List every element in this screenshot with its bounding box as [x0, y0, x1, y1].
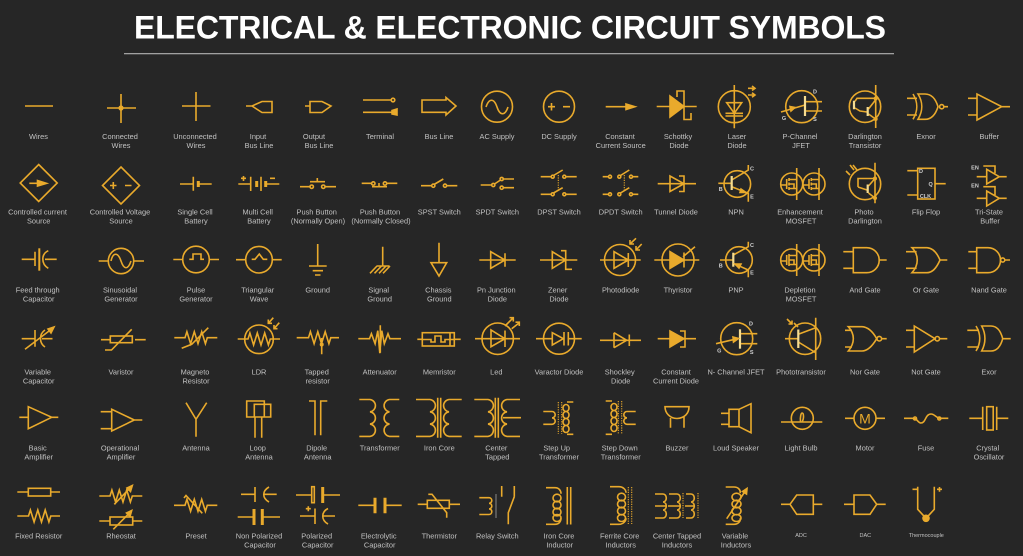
symbol: Pulse Generator — [173, 246, 219, 304]
symbol: Controlled Voltage Source: Controlled Voltage — [90, 208, 150, 216]
symbol: N-Channel JFET: G — [717, 348, 721, 354]
symbol: PNP: C — [750, 243, 754, 249]
symbol: Wires — [25, 106, 53, 141]
symbol: Unconnected Wires: Wires — [187, 141, 206, 150]
symbol: LDR: LDR — [252, 368, 266, 376]
symbol: Enhancement MOSFET: MOSFET — [786, 216, 817, 226]
symbol: Motor: M — [859, 410, 871, 426]
symbol: Preset — [174, 496, 217, 540]
symbol: Rheostat — [99, 486, 142, 540]
symbol: Loud Speaker — [713, 404, 760, 452]
symbol: Motor: Motor — [856, 444, 875, 452]
symbol: Variable Capacitor: Variable — [24, 368, 51, 376]
symbol: Variable Capacitor: Capacitor — [23, 376, 55, 386]
symbol: Not Gate: Not Gate — [911, 368, 941, 376]
symbol: Or Gate: Or Gate — [913, 286, 939, 295]
symbol: DPDT Switch — [599, 170, 643, 216]
symbol: Antenna — [182, 403, 211, 452]
symbol: Variable Capacitor — [22, 327, 55, 386]
symbol: P-Channel JFET: S — [813, 117, 817, 123]
symbol: Feed through Capacitor: Feed through — [16, 286, 60, 295]
symbol: Led — [475, 318, 520, 376]
symbol: Chassis Ground — [425, 243, 452, 304]
symbol: Magneto Resistor: Magneto — [181, 368, 209, 376]
symbol: Constant Current Source — [596, 104, 646, 150]
symbol: NPN: NPN — [728, 208, 744, 216]
symbol: Variable Inductors: Inductors — [721, 540, 752, 550]
symbol: Multi Cell Battery: Multi Cell — [243, 208, 273, 216]
symbol: Controlled Voltage Source — [90, 167, 150, 226]
symbol: P-Channel JFET: JFET — [792, 141, 810, 150]
symbol: Zener Diode: Diode — [549, 295, 569, 304]
symbol: Polarized Capacitor: Capacitor — [302, 540, 334, 550]
symbol: DC Supply: DC Supply — [541, 132, 577, 141]
symbol: Pn Junction Diode — [477, 252, 516, 304]
symbol: Ferrite Core Inductors: Inductors — [605, 540, 636, 550]
symbol: Tunnel Diode: Tunnel Diode — [654, 208, 698, 216]
symbol: Step Up Transformer — [539, 402, 580, 462]
symbol: Magneto Resistor: Resistor — [182, 376, 210, 386]
symbol: Flip Flop — [907, 168, 946, 216]
symbol: Nand Gate: Nand Gate — [971, 286, 1007, 295]
symbol: Controlled Voltage Source: Source — [109, 216, 133, 226]
symbol: Magneto Resistor — [174, 328, 217, 386]
symbol: Schottky Diode: Diode — [669, 141, 689, 150]
symbol: Basic Amplifier — [19, 407, 58, 462]
symbol: Loop Antenna: Loop — [249, 444, 266, 452]
symbol: Tri-State Buffer: Tri-State — [975, 208, 1003, 216]
symbol: Single Cell Battery — [177, 177, 213, 226]
symbol: Varactor Diode: Varactor Diode — [535, 368, 583, 376]
symbol: Wires: Wires — [29, 132, 48, 141]
symbol: Not Gate — [906, 326, 947, 376]
symbol: Triangular Wave: Wave — [250, 295, 268, 304]
symbol: Constant Current Diode: Current Diode — [653, 376, 699, 386]
symbol: Iron Core Inductor — [544, 487, 574, 550]
symbol: Ferrite Core Inductors: Ferrite Core — [600, 532, 639, 540]
symbol: Push Button (Normally Closed): Push Button — [360, 208, 400, 216]
symbol: Led: Led — [490, 368, 502, 376]
symbol: Non Polarized Capacitor: Non Polarized — [236, 532, 282, 540]
symbol: Signal Ground — [367, 247, 392, 304]
symbol: Relay Switch — [476, 486, 519, 540]
symbol: Electrolytic Capacitor: Electrolytic — [361, 532, 397, 540]
symbol: Preset: Preset — [185, 532, 207, 540]
symbol: DC Supply — [541, 91, 577, 141]
symbol: Enhancement MOSFET: Enhancement — [777, 208, 823, 216]
symbol: Flip Flop: CLK — [920, 194, 931, 200]
symbol: Darlington Transistor — [848, 85, 882, 150]
symbol: SPST Switch: SPST Switch — [418, 208, 461, 216]
symbol: Variable Inductors — [721, 487, 752, 550]
symbol: Single Cell Battery: Single Cell — [177, 208, 213, 216]
symbol: Controlled current Source — [8, 164, 67, 226]
symbol: Electrolytic Capacitor — [358, 498, 402, 550]
symbol: And Gate: And Gate — [849, 286, 881, 295]
symbol: Buffer — [968, 94, 1010, 141]
symbol: Push Button (Normally Open) — [291, 178, 345, 226]
symbol: DPST Switch — [537, 170, 581, 216]
symbol: Polarized Capacitor — [296, 487, 340, 550]
symbol: Photo Darlington: Darlington — [848, 216, 882, 226]
symbol: Center Tapped: Tapped — [485, 452, 509, 462]
symbol: Tapped resistor — [297, 332, 339, 386]
symbol: Light Bulb — [781, 407, 822, 452]
symbol: Depletion MOSFET: Depletion — [784, 286, 816, 295]
symbol: Shockley Diode: Shockley — [605, 368, 635, 376]
symbol: Step Down Transformer: Transformer — [601, 452, 641, 462]
symbol: Thermocouple: Thermocouple — [909, 533, 944, 539]
symbol: Bus Line — [422, 98, 456, 141]
symbol: Buzzer: Buzzer — [665, 444, 689, 452]
symbol: Step Up Transformer: Step Up — [543, 444, 570, 452]
symbol: Phototransistor: Phototransistor — [776, 368, 826, 376]
symbol: PNP — [719, 242, 754, 295]
symbol: Schottky Diode: Schottky — [664, 132, 692, 141]
symbol: ADC: ADC — [795, 533, 807, 539]
symbol: Fuse: Fuse — [918, 444, 934, 452]
symbol: Push Button (Normally Open): (Normally Open) — [291, 216, 345, 226]
symbol: Crystal Oscillator: Crystal — [976, 444, 1000, 452]
symbol: NPN: C — [750, 166, 754, 172]
symbol: Controlled current Source: Source — [27, 216, 50, 226]
symbol: Controlled current Source: Controlled current — [8, 208, 67, 216]
symbol: Constant Current Diode: Constant — [661, 368, 691, 376]
symbol: Laser Diode: Laser — [728, 132, 747, 141]
symbol: SPDT Switch — [476, 177, 519, 216]
symbol: Ferrite Core Inductors — [600, 487, 639, 550]
symbol: Basic Amplifier: Amplifier — [24, 452, 54, 462]
symbol: DPDT Switch: DPDT Switch — [599, 208, 643, 216]
symbol: Exor — [967, 326, 1011, 376]
symbol: Dipole Antenna: Antenna — [304, 452, 332, 462]
symbol: Variable Inductors: Variable — [722, 532, 748, 540]
symbol: Light Bulb: Light Bulb — [785, 444, 817, 452]
symbol: Crystal Oscillator — [969, 407, 1008, 462]
symbol: Signal Ground: Signal — [368, 286, 389, 295]
symbol: Input Bus Line: Bus Line — [245, 141, 273, 150]
symbol: Attenuator — [358, 325, 401, 376]
symbol: Thermistor: Thermistor — [422, 532, 457, 540]
symbol: Buzzer — [665, 407, 689, 452]
symbol: Tapped resistor: resistor — [306, 376, 330, 386]
symbol: Electrolytic Capacitor: Capacitor — [364, 540, 396, 550]
symbol: Thermistor — [418, 494, 460, 540]
symbol: Step Down Transformer: Step Down — [602, 444, 638, 452]
symbol: Attenuator: Attenuator — [363, 368, 397, 376]
symbol: Buffer: Buffer — [980, 132, 1000, 141]
symbol: NPN: B — [719, 187, 723, 193]
symbol: Connected Wires — [102, 94, 138, 150]
symbol: Transformer: Transformer — [360, 444, 400, 452]
symbol: Exnor — [907, 94, 948, 141]
symbol: Transformer — [359, 400, 400, 452]
symbol: Center Tapped Inductors: Center Tapped — [653, 532, 701, 540]
symbol: Multi Cell Battery — [238, 176, 279, 226]
symbol: Nand Gate — [968, 248, 1010, 295]
symbol: ADC — [781, 495, 822, 539]
symbol: N-Channel JFET: D — [749, 322, 753, 328]
symbol: Sinusoidal Generator: Sinusoidal — [103, 286, 137, 295]
symbol: Input Bus Line — [245, 102, 273, 150]
symbol: Flip Flop: D — [919, 169, 923, 175]
symbol: Or Gate — [906, 248, 947, 295]
symbol: Feed through Capacitor: Capacitor — [23, 295, 55, 304]
symbol: Bus Line: Bus Line — [425, 132, 453, 141]
symbol: Tri-State Buffer: Buffer — [980, 216, 1000, 226]
symbol: NPN — [718, 165, 754, 216]
symbol: DAC — [844, 495, 886, 539]
symbol: DPST Switch: DPST Switch — [537, 208, 581, 216]
symbol: Sinusoidal Generator: Generator — [104, 295, 138, 304]
symbol: AC Supply: AC Supply — [480, 132, 515, 141]
symbol: Pulse Generator: Pulse — [187, 286, 205, 295]
symbol: Laser Diode — [718, 85, 755, 150]
symbol: Nor Gate — [845, 327, 887, 376]
symbol: Center Tapped: Center — [485, 444, 508, 452]
symbol: Signal Ground: Ground — [367, 295, 392, 304]
symbol: Step Up Transformer: Transformer — [539, 452, 580, 462]
symbol: Tapped resistor: Tapped — [305, 368, 329, 376]
symbol: Loop Antenna — [245, 401, 274, 462]
symbol: Ground: Ground — [305, 286, 330, 295]
symbol: Tri-State Buffer: EN — [971, 166, 979, 172]
symbol: Zener Diode — [540, 251, 577, 304]
symbol: Memristor: Memristor — [423, 368, 456, 376]
symbol: Varactor Diode — [535, 323, 583, 376]
symbol: N-Channel JFET — [707, 322, 765, 376]
symbol: Push Button (Normally Open): Push Button — [297, 208, 337, 216]
symbol: Dipole Antenna — [304, 401, 332, 462]
symbol: N-Channel JFET: N- Channel JFET — [707, 368, 765, 376]
symbol: Single Cell Battery: Battery — [184, 216, 208, 226]
symbol: Shockley Diode: Diode — [611, 376, 630, 386]
symbol: Connected Wires: Connected — [102, 132, 138, 141]
symbol: Tunnel Diode — [654, 176, 698, 216]
symbol: Center Tapped Inductors — [653, 493, 701, 550]
symbol: Step Down Transformer — [601, 401, 641, 462]
symbol: Tri-State Buffer — [971, 166, 1007, 226]
symbol: Exnor: Exnor — [916, 132, 936, 141]
symbol: Unconnected Wires: Unconnected — [173, 132, 217, 141]
symbol: Exor: Exor — [981, 368, 997, 376]
symbol: NPN: E — [750, 194, 754, 200]
symbol: Terminal — [363, 98, 397, 141]
symbol: Terminal: Terminal — [366, 132, 394, 141]
symbol: Output Bus Line — [303, 102, 333, 150]
symbol: Depletion MOSFET: MOSFET — [786, 295, 817, 304]
symbol: Photodiode: Photodiode — [602, 286, 639, 295]
symbol: Loop Antenna: Antenna — [245, 452, 274, 462]
symbol: Push Button (Normally Closed): (Normally Closed) — [351, 216, 411, 226]
symbol: Unconnected Wires — [173, 92, 217, 150]
symbol: Nor Gate: Nor Gate — [850, 368, 880, 376]
symbol: Non Polarized Capacitor — [236, 487, 282, 550]
symbol: Operational Amplifier: Amplifier — [107, 452, 136, 462]
symbol: Flip Flop: Q — [929, 182, 934, 188]
symbol: Phototransistor — [776, 318, 826, 376]
symbol: P-Channel JFET: G — [782, 116, 786, 122]
symbol: Fuse — [904, 414, 948, 452]
symbol: Feed through Capacitor — [16, 248, 60, 304]
symbol: Photo Darlington: Photo — [854, 208, 874, 216]
symbol: Center Tapped Inductors: Inductors — [662, 540, 693, 550]
symbol: Darlington Transistor: Darlington — [848, 132, 882, 141]
symbol: Fixed Resistor — [15, 488, 63, 540]
symbol: PNP: B — [719, 264, 723, 270]
symbol: PNP: E — [750, 271, 754, 277]
symbol: Chassis Ground: Ground — [427, 295, 452, 304]
symbol: Output Bus Line: Bus Line — [305, 141, 333, 150]
symbol: SPST Switch — [418, 179, 461, 216]
symbol: SPDT Switch: SPDT Switch — [476, 208, 519, 216]
symbol: Relay Switch: Relay Switch — [476, 532, 519, 540]
symbol: Flip Flop: Flip Flop — [912, 208, 940, 216]
symbol: Ground — [305, 244, 330, 295]
symbol: Iron Core Inductor: Iron Core — [544, 532, 574, 540]
symbol: Iron Core Inductor: Inductor — [546, 540, 574, 550]
symbol: Rheostat: Rheostat — [106, 532, 136, 540]
symbol: Shockley Diode — [600, 333, 641, 386]
symbol: Input Bus Line: Input — [250, 132, 266, 141]
symbol: Operational Amplifier: Operational — [101, 444, 139, 452]
symbol: Loud Speaker: Loud Speaker — [713, 444, 760, 452]
symbol: Enhancement MOSFET — [777, 168, 825, 226]
symbol: DAC: DAC — [859, 533, 871, 539]
symbol: PNP: PNP — [728, 286, 744, 295]
symbol: Output Bus Line: Output — [303, 132, 325, 141]
symbol: Multi Cell Battery: Battery — [247, 216, 271, 226]
symbol: Connected Wires: Wires — [112, 141, 131, 150]
symbol: Tri-State Buffer: EN — [971, 183, 979, 189]
symbol: N-Channel JFET: S — [750, 350, 754, 356]
symbol: Constant Current Source: Current Source — [596, 141, 646, 150]
symbol: Varistor: Varistor — [109, 368, 134, 376]
symbol: Memristor — [417, 333, 461, 376]
symbol: Varistor — [101, 329, 146, 376]
symbol: Depletion MOSFET — [781, 244, 825, 304]
symbol: Operational Amplifier — [101, 409, 142, 462]
symbol: Iron Core: Iron Core — [424, 444, 455, 452]
symbol: Antenna: Antenna — [182, 444, 211, 452]
symbol: Triangular Wave — [236, 246, 282, 304]
symbol: And Gate — [843, 248, 887, 295]
symbol: Pulse Generator: Generator — [179, 295, 213, 304]
symbol: Triangular Wave: Triangular — [241, 286, 275, 295]
symbol: Thyristor: Thyristor — [664, 286, 693, 295]
symbol: Constant Current Source: Constant — [605, 132, 635, 141]
symbol: Polarized Capacitor: Polarized — [301, 532, 332, 540]
symbol: AC Supply — [480, 91, 515, 141]
symbol: Laser Diode: Diode — [727, 141, 747, 150]
symbol: Motor — [845, 407, 885, 452]
symbol: Crystal Oscillator: Oscillator — [974, 452, 1005, 462]
symbol: Zener Diode: Zener — [548, 286, 568, 295]
symbol: P-Channel JFET: P-Channel — [783, 132, 818, 141]
symbol: Chassis Ground: Chassis — [425, 286, 452, 295]
symbol: Schottky Diode — [657, 91, 697, 150]
symbol: LDR — [238, 318, 280, 376]
symbol: Constant Current Diode — [653, 331, 699, 386]
symbol: P-Channel JFET — [781, 90, 822, 150]
symbol: Pn Junction Diode: Pn Junction — [477, 286, 516, 295]
symbol: Iron Core — [416, 398, 462, 452]
symbol: Fixed Resistor: Fixed Resistor — [15, 532, 63, 540]
symbol: Push Button (Normally Closed) — [351, 182, 411, 226]
symbol: Non Polarized Capacitor: Capacitor — [244, 540, 276, 550]
symbol: Photodiode — [600, 238, 642, 295]
symbol: Thermocouple — [909, 487, 944, 539]
title: ELECTRICAL & ELECTRONIC CIRCUIT SYMBOLS — [134, 10, 886, 46]
symbol: Center Tapped — [474, 398, 521, 462]
symbol: Pn Junction Diode: Diode — [488, 295, 507, 304]
symbol: Basic Amplifier: Basic — [29, 444, 47, 452]
symbol: P-Channel JFET: D — [813, 90, 817, 96]
symbol: Thyristor — [654, 244, 699, 295]
symbol: Darlington Transistor: Transistor — [849, 141, 882, 150]
symbol: Photo Darlington — [846, 163, 882, 226]
symbol: Dipole Antenna: Dipole — [306, 444, 327, 452]
symbol: Sinusoidal Generator — [99, 248, 144, 304]
